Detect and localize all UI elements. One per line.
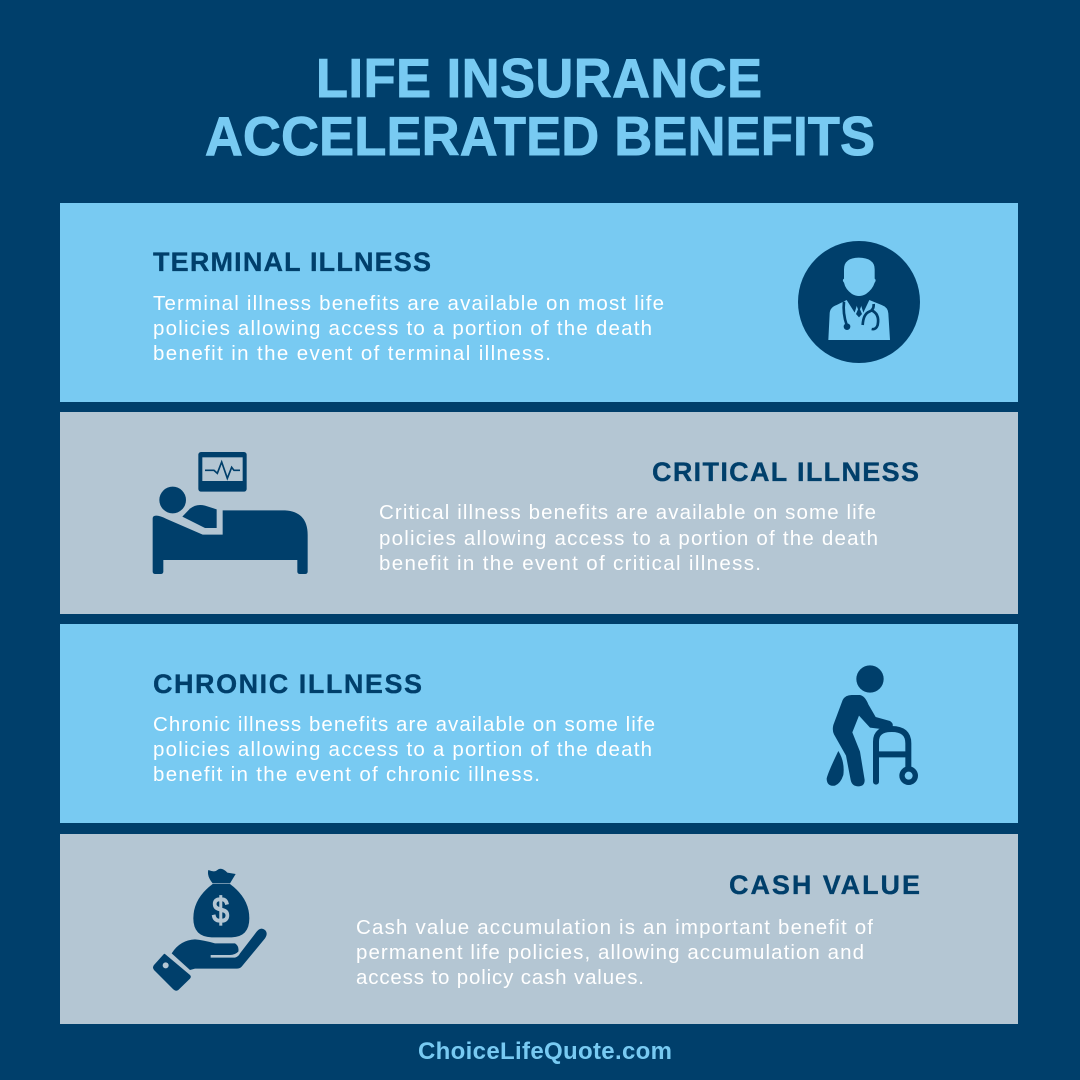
icon: person with walker [827, 665, 915, 786]
text block: terminal illness [153, 292, 664, 365]
text block: cash value: Cash value accumulation is an important benefit of [356, 916, 873, 939]
footer: website: ChoiceLifeQuote.com [418, 1038, 672, 1065]
icon: doctor with stethoscope [798, 241, 920, 363]
text block: critical illness: benefit in the event of critical illness. [379, 552, 761, 575]
heading: terminal illness: TERMINAL ILLNESS [153, 247, 431, 277]
icon: hand holding money bag [153, 869, 267, 991]
text block: critical illness: Critical illness benefits are available on some life [379, 501, 876, 524]
text block: cash value: access to policy cash values. [356, 966, 644, 989]
text block: chronic illness: Chronic illness benefits are available on some life [153, 713, 655, 736]
heading: critical illness: CRITICAL ILLNESS [652, 457, 919, 487]
panel: critical illness [60, 412, 1018, 614]
text block: cash value [356, 916, 873, 989]
text block: terminal illness: Terminal illness benefits are available on most life [153, 292, 664, 315]
icon: hand holding money bag: $ [212, 891, 230, 931]
text block: terminal illness: benefit in the event of terminal illness. [153, 342, 551, 365]
heading: chronic illness: CHRONIC ILLNESS [153, 669, 422, 699]
icon: patient in bed with monitor [153, 452, 308, 574]
text block: chronic illness [153, 713, 655, 786]
text block: critical illness: policies allowing access to a portion of the death [379, 527, 878, 550]
text block: chronic illness: policies allowing access to a portion of the death [153, 738, 652, 761]
heading: cash value: CASH VALUE [729, 870, 920, 900]
text block: terminal illness: policies allowing access to a portion of the death [153, 317, 652, 340]
text block: cash value: permanent life policies, allowing accumulation and [356, 941, 864, 964]
title: LIFE INSURANCE [316, 48, 762, 109]
panel: cash value [60, 834, 1018, 1024]
title [205, 48, 875, 167]
text block: chronic illness: benefit in the event of chronic illness. [153, 763, 540, 786]
title: ACCELERATED BENEFITS [205, 106, 875, 167]
panel: chronic illness [60, 624, 1018, 823]
panel: terminal illness [60, 203, 1018, 402]
text block: critical illness [379, 501, 878, 575]
